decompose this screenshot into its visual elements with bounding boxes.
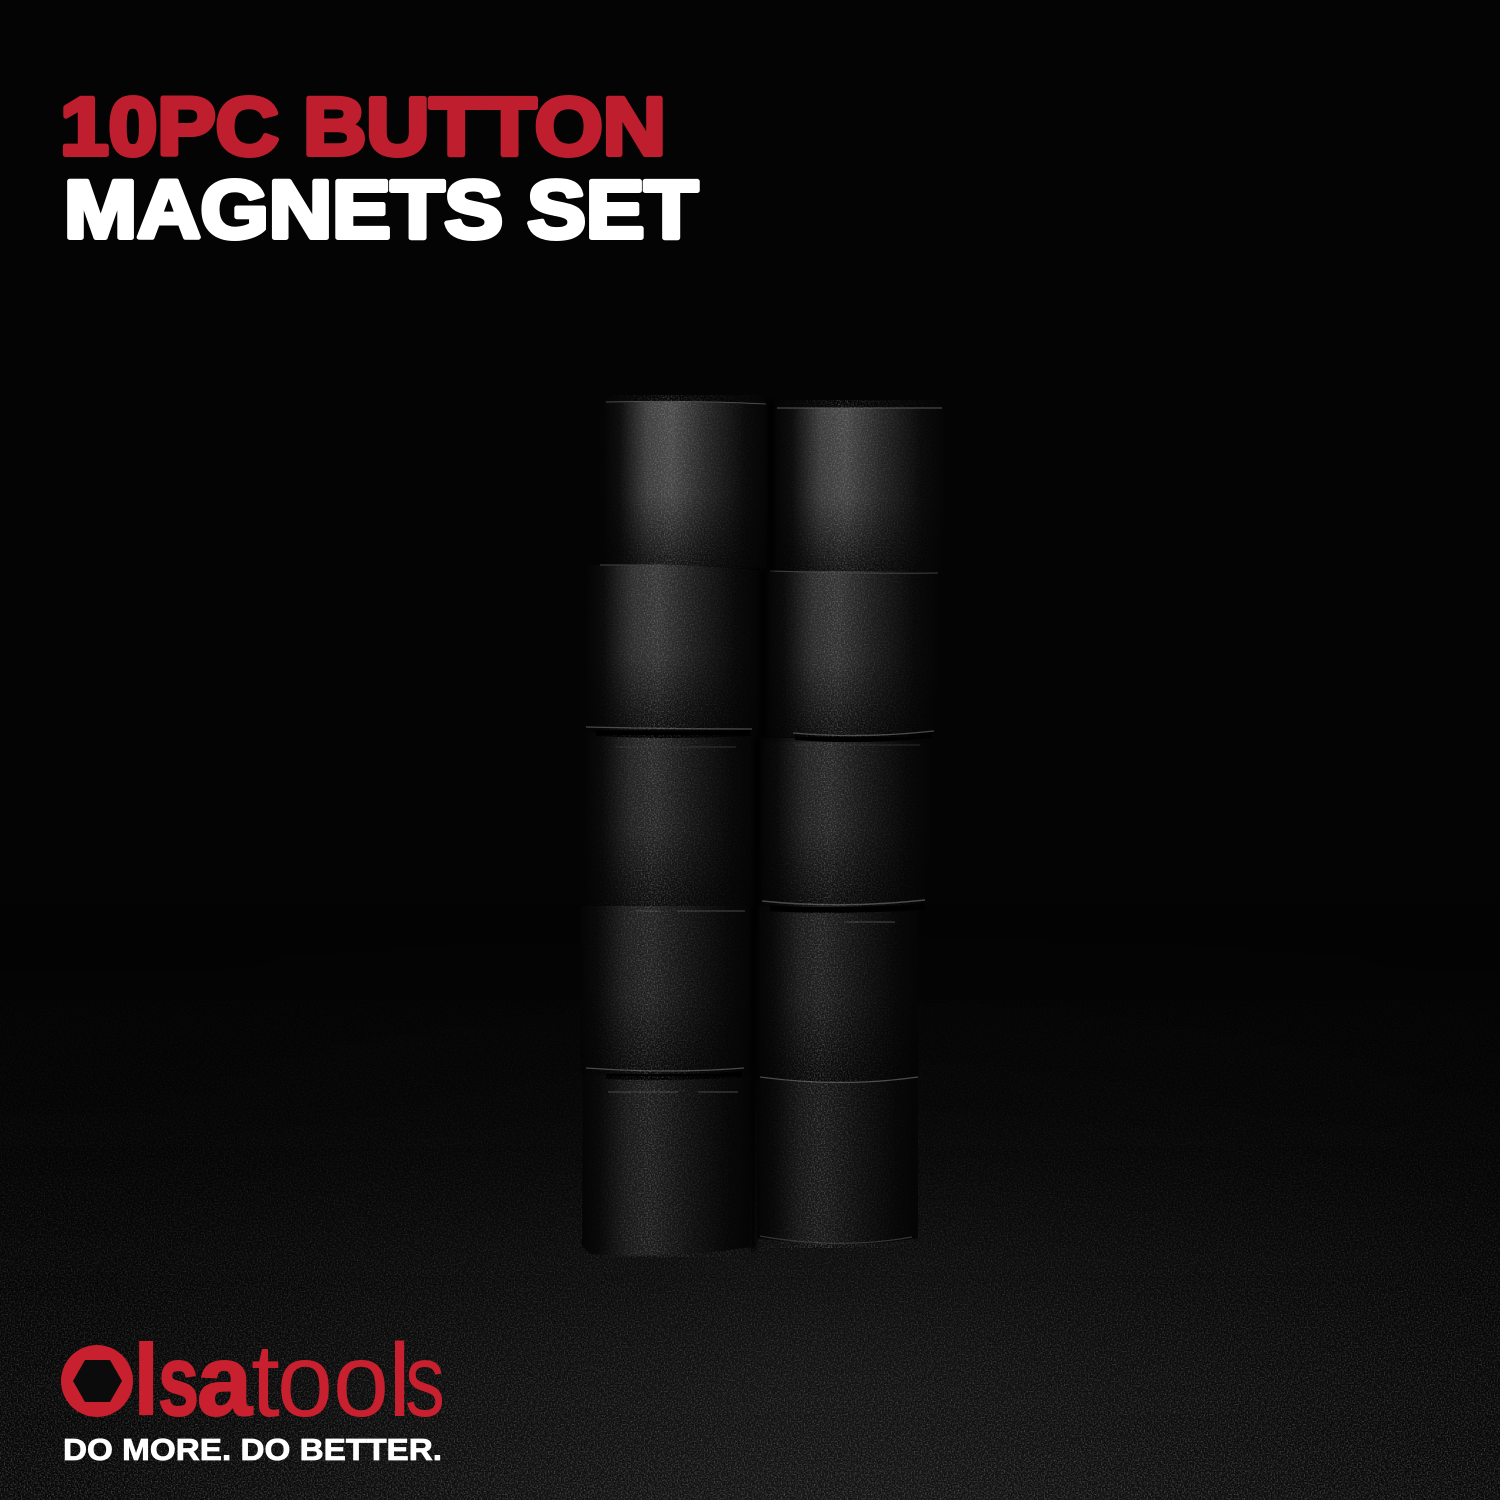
magnet 4 left stack <box>580 906 752 1074</box>
logo letter a: a <box>197 1325 253 1437</box>
magnet 1 right stack <box>775 400 945 572</box>
logo letter s thin: s <box>405 1323 445 1439</box>
magnet 2 left stack <box>586 565 760 730</box>
floor surface <box>0 1021 1500 1500</box>
title line: MAGNETS SET: MAGNETS SET <box>64 164 698 256</box>
left stack <box>580 395 768 1256</box>
magnet 3 left stack <box>585 727 755 908</box>
logo letter O with hexagon counter: O <box>62 1329 132 1436</box>
magnet 4 right stack <box>757 900 925 1080</box>
logo letter l thin: l <box>388 1323 411 1439</box>
logo: Olsatools <box>61 1323 445 1439</box>
magnet 1 left stack <box>603 395 768 570</box>
magnet 5 right stack <box>757 1077 918 1245</box>
magnet 3 right stack <box>760 731 934 906</box>
magnet 5 left stack <box>582 1068 750 1256</box>
title line: 10PC BUTTON: 10PC BUTTON <box>60 82 666 172</box>
logo letter t: t <box>251 1323 280 1439</box>
logo letter l: l <box>132 1323 160 1437</box>
right stack <box>757 400 945 1245</box>
logo letter s: s <box>158 1325 199 1437</box>
title <box>60 82 698 256</box>
magnet stacks <box>575 390 950 1260</box>
magnet 2 right stack <box>767 571 938 737</box>
logo letters oo: oo <box>277 1323 389 1439</box>
tagline: DO MORE. DO BETTER. <box>63 1432 442 1467</box>
